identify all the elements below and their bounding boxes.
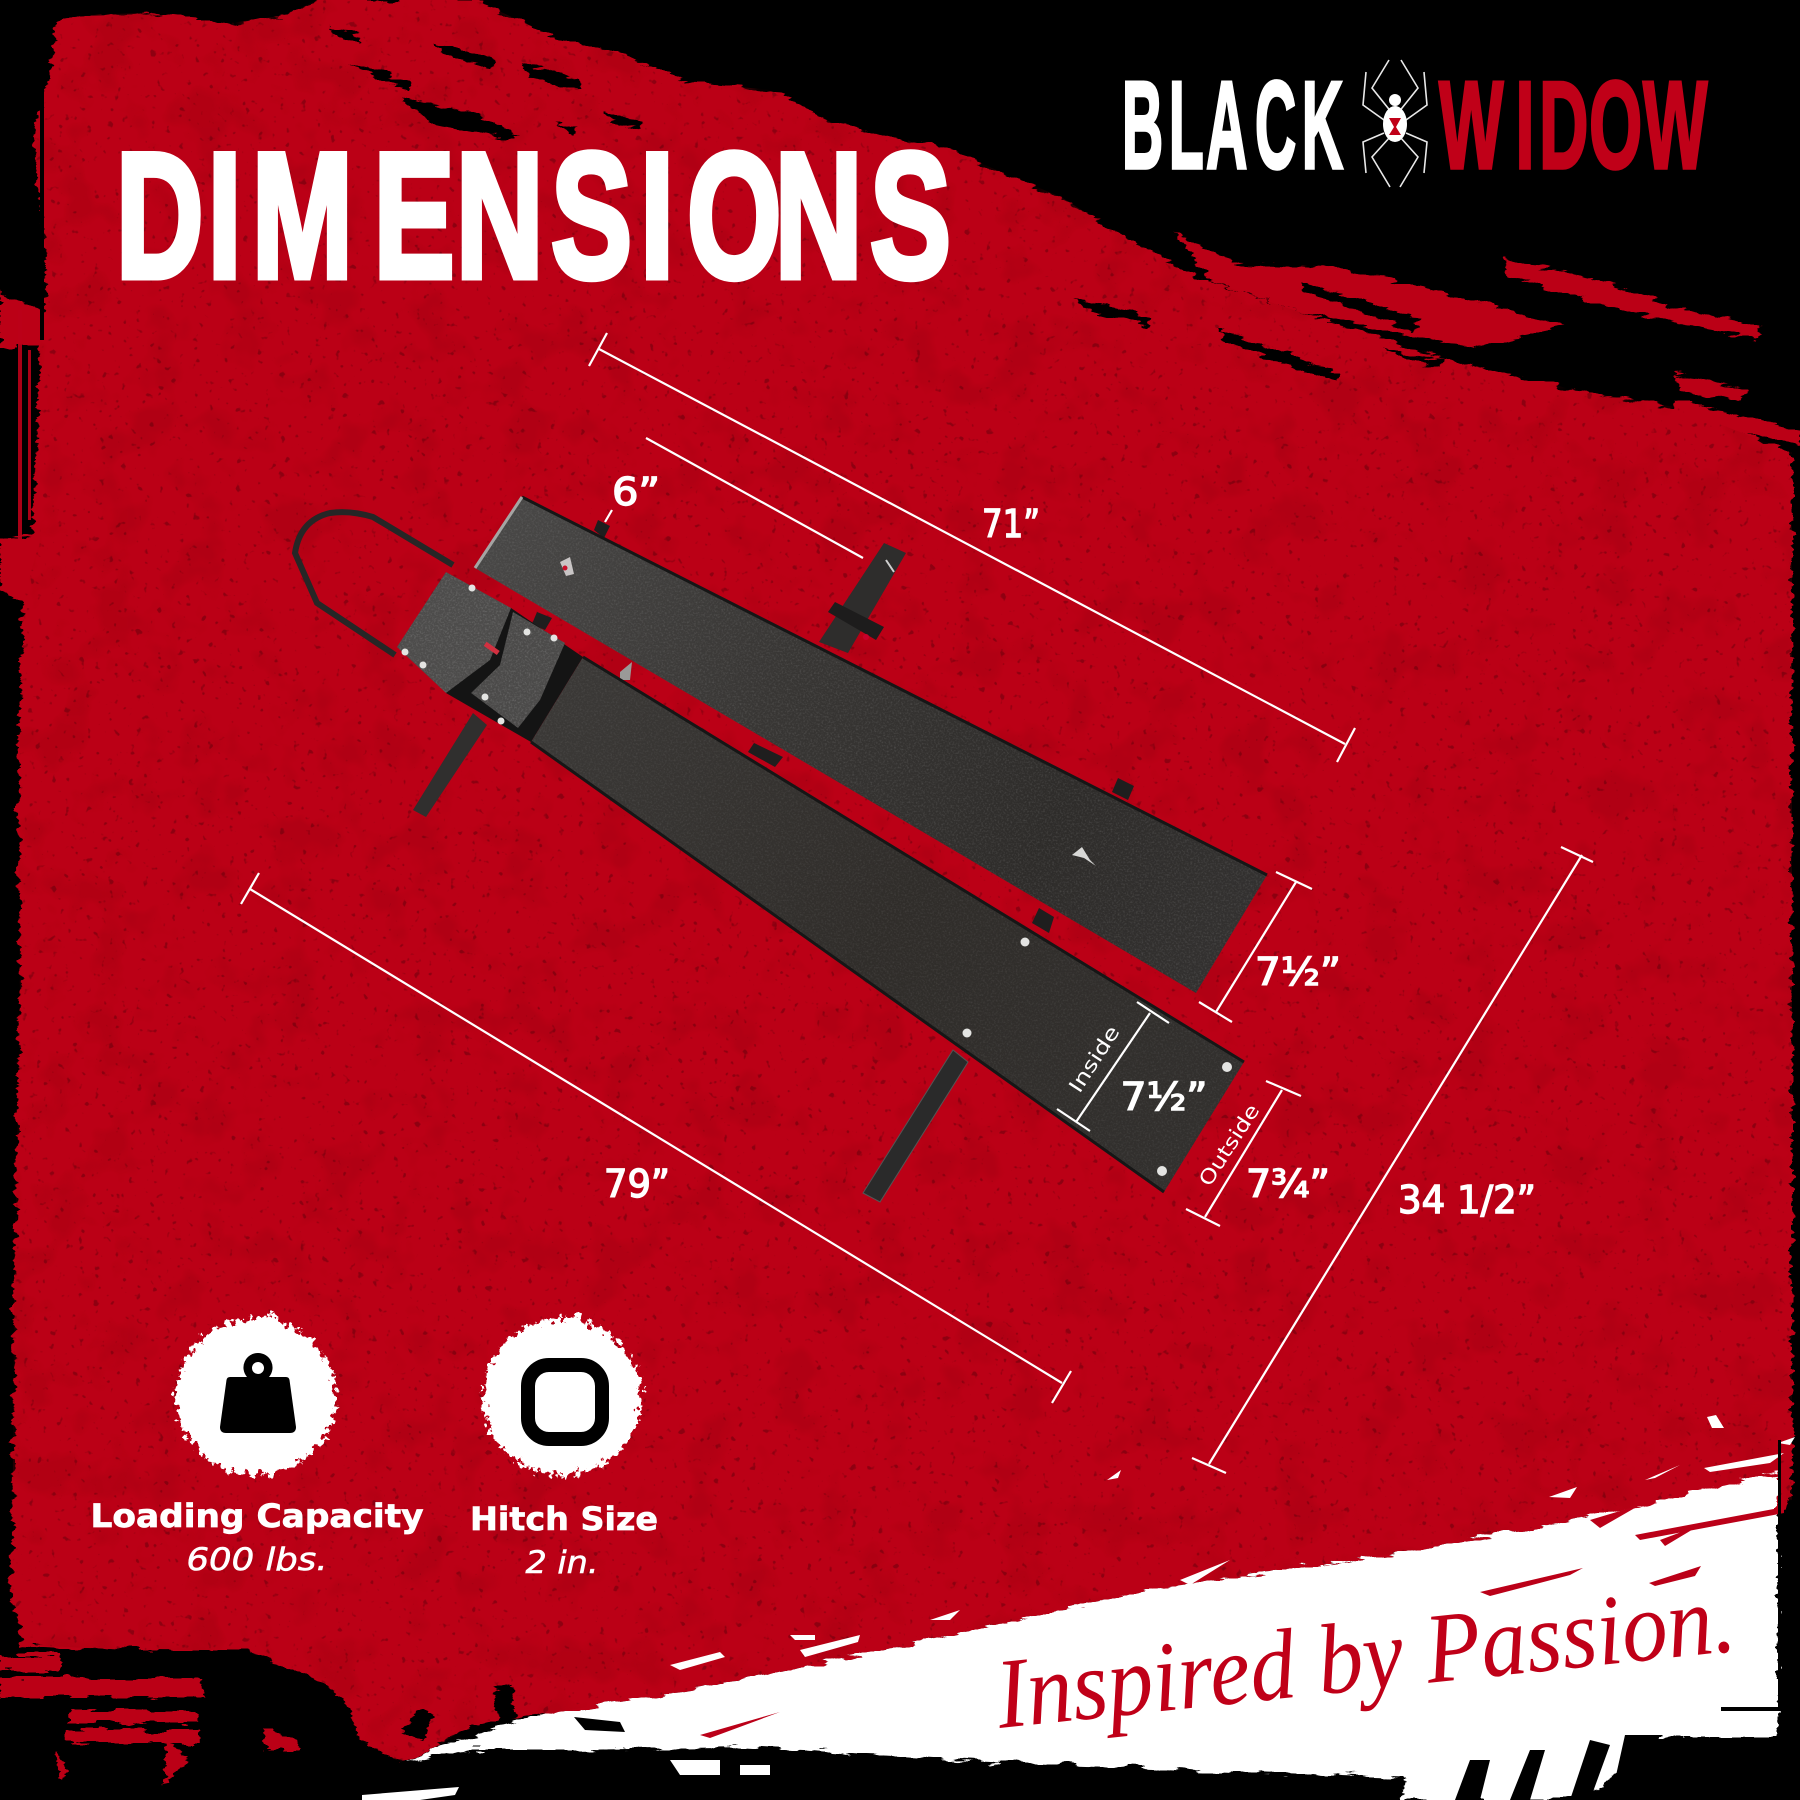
wing nuts <box>560 557 1096 866</box>
dimension labels: 7½” <box>1255 950 1341 994</box>
logo: Black Widow: BLACK <box>1122 58 1343 195</box>
spec: loading capacity: 600 lbs. <box>186 1542 328 1578</box>
dimension labels: 34 1/2” <box>1398 1178 1536 1222</box>
title: DIMENSIONS <box>116 117 951 316</box>
icon: spider <box>1363 60 1427 187</box>
spec: hitch size: Hitch Size <box>470 1500 658 1538</box>
dimension: inside width <box>1057 1002 1169 1131</box>
upper ramp <box>475 497 1267 993</box>
loading plate: first <box>397 572 511 693</box>
red reflector <box>484 642 500 655</box>
dimension labels <box>604 470 1536 1222</box>
hitch tube: upper <box>819 543 906 653</box>
dimension: outside width <box>1186 1081 1301 1226</box>
dimension labels: 79” <box>604 1162 670 1206</box>
label: Inside: Inside <box>1064 1021 1124 1097</box>
logo: Black Widow <box>1122 56 1708 195</box>
dimension labels: 7½” <box>1120 1075 1208 1119</box>
dimension: 6 in <box>605 438 863 558</box>
bolts <box>402 584 1232 1176</box>
dimension: 79 in <box>241 873 1071 1403</box>
loading handle <box>295 512 453 655</box>
hitch tube: lower left <box>413 713 487 817</box>
loading plate: second <box>471 612 565 728</box>
panel: white tagline band <box>362 1415 1795 1800</box>
small connectors between ramps <box>532 520 1134 933</box>
lower ramp <box>531 657 1244 1192</box>
logo: Black Widow: WIDOW <box>1439 56 1708 195</box>
icon: square tube <box>483 1314 641 1475</box>
spec: hitch size: 2 in. <box>526 1545 598 1581</box>
dimension: 71 in <box>589 333 1355 762</box>
icon: weight <box>176 1312 336 1475</box>
hitch tube: lower right <box>863 1050 968 1202</box>
spec: loading capacity <box>90 1312 424 1578</box>
dimension: upper ramp width <box>1199 872 1312 1022</box>
label: Outside: Outside <box>1194 1099 1264 1191</box>
dimension lines <box>241 333 1593 1473</box>
spec: loading capacity: Loading Capacity <box>90 1497 424 1535</box>
dimension labels: 7¾” <box>1246 1162 1330 1206</box>
dimension labels: 71” <box>982 502 1040 546</box>
rack: hitch carrier photo <box>295 497 1267 1202</box>
spec: hitch size <box>470 1314 658 1581</box>
dimension labels: 6” <box>612 470 660 514</box>
loading plate: frame gap <box>446 608 583 742</box>
tagline: Inspired by Passion. <box>990 1562 1740 1750</box>
dimension: 34 1/2 in <box>1192 847 1593 1473</box>
